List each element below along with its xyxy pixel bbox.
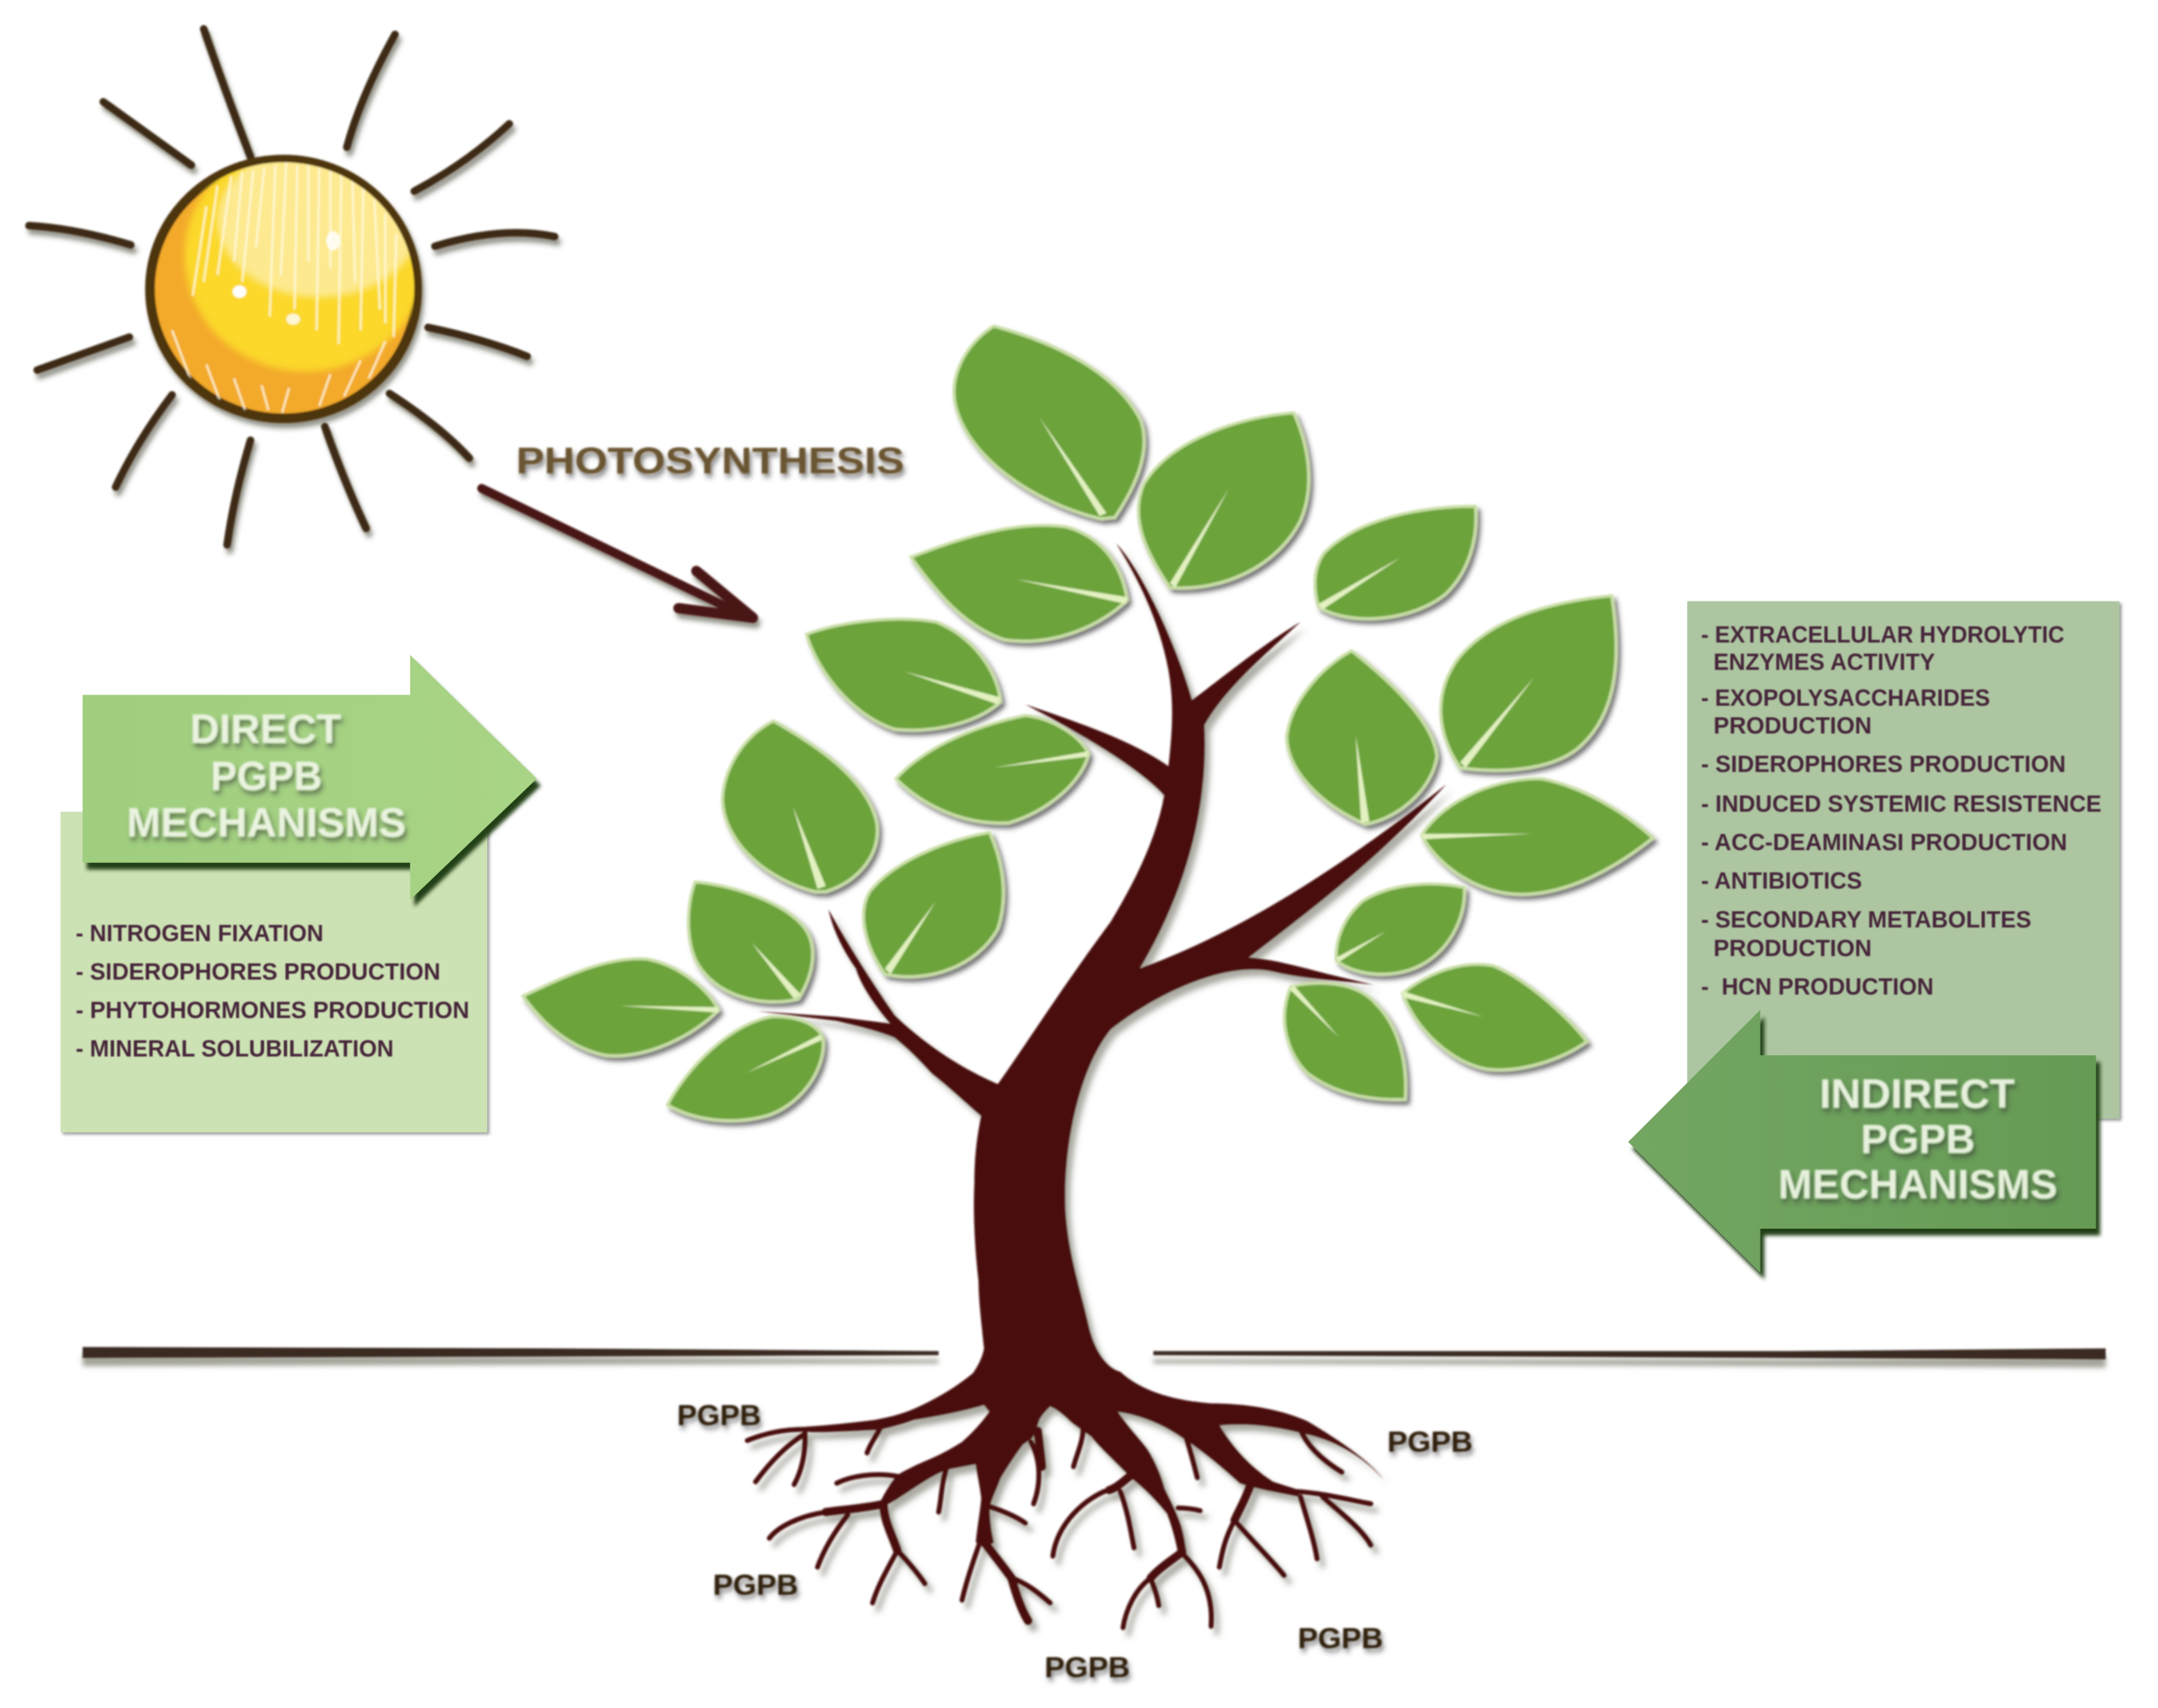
leaf 11 [667, 1017, 823, 1121]
leaf 14 [1421, 778, 1653, 895]
leaf 7 [722, 721, 877, 891]
indirect mechanisms list: PRODUCTION [1714, 712, 1872, 738]
PGPB root labels: PGPB [1298, 1623, 1383, 1655]
indirect mechanisms list [1701, 621, 2102, 1000]
heading: photosynthesis: PHOTOSYNTHESIS [516, 441, 904, 482]
indirect arrow [1628, 1010, 2096, 1273]
sun rays [29, 29, 555, 545]
direct arrow title: PGPB [210, 753, 322, 799]
indirect mechanisms list: PRODUCTION [1714, 935, 1872, 961]
direct arrow title: DIRECT [190, 707, 341, 753]
direct mechanisms list [76, 919, 469, 1062]
leaf 2 [1138, 413, 1308, 588]
indirect arrow title [1779, 1071, 2057, 1208]
indirect list background [1687, 602, 2120, 1118]
leaf 17 [1285, 983, 1406, 1100]
leaf 15 [1336, 884, 1464, 974]
root branches [747, 1427, 1371, 1628]
leaf 5 [807, 619, 1001, 730]
leaf 6 [896, 715, 1089, 823]
indirect mechanisms list: ENZYMES ACTIVITY [1714, 649, 1935, 675]
direct arrow title [126, 707, 406, 846]
direct arrow title: MECHANISMS [126, 800, 406, 846]
direct mechanisms list: - SIDEROPHORES PRODUCTION [76, 959, 440, 985]
indirect arrow title: MECHANISMS [1779, 1162, 2057, 1208]
PGPB root labels [677, 1400, 1473, 1684]
PGPB root labels: PGPB [1044, 1652, 1130, 1684]
leaf 3 [911, 525, 1127, 641]
direct arrow [83, 654, 537, 900]
direct mechanisms list: - MINERAL SOLUBILIZATION [76, 1036, 394, 1062]
indirect mechanisms list: - SIDEROPHORES PRODUCTION [1701, 750, 2066, 777]
panel: indirect mechanisms [1628, 602, 2120, 1273]
indirect arrow title: PGPB [1861, 1116, 1975, 1162]
icon: sun [29, 29, 555, 545]
leaf 8 [863, 832, 1003, 977]
PGPB root labels: PGPB [677, 1400, 761, 1432]
indirect mechanisms list: - ANTIBIOTICS [1701, 867, 1862, 894]
leaf 16 [1401, 965, 1587, 1070]
leaf 4 [1315, 507, 1476, 619]
leaf 12 [1287, 651, 1437, 825]
leaf 1 [954, 326, 1144, 519]
direct mechanisms list: - PHYTOHORMONES PRODUCTION [76, 997, 469, 1024]
PGPB root labels: PGPB [713, 1569, 798, 1601]
arrow: sunlight to plant [482, 489, 753, 618]
leaf 13 [1441, 596, 1616, 770]
indirect mechanisms list: - ACC-DEAMINASI PRODUCTION [1701, 829, 2067, 855]
indirect mechanisms list: - EXTRACELLULAR HYDROLYTIC [1701, 621, 2065, 648]
direct mechanisms list: - NITROGEN FIXATION [76, 919, 323, 946]
leaves [523, 326, 1653, 1121]
indirect arrow title: INDIRECT [1820, 1071, 2014, 1117]
leaf 10 [523, 959, 719, 1056]
indirect mechanisms list: - SECONDARY METABOLITES [1701, 906, 2032, 932]
indirect mechanisms list: - EXOPOLYSACCHARIDES [1701, 684, 1990, 711]
direct list background [61, 812, 487, 1132]
tree trunk, branches and roots [747, 543, 1446, 1628]
sun disc [150, 140, 426, 419]
indirect mechanisms list: - INDUCED SYSTEMIC RESISTENCE [1701, 790, 2102, 817]
panel: direct mechanisms [61, 654, 537, 1132]
PGPB root labels: PGPB [1387, 1426, 1473, 1459]
indirect mechanisms list: - HCN PRODUCTION [1701, 973, 1933, 1000]
soil line [83, 1347, 2106, 1359]
leaf 9 [689, 882, 813, 1001]
trunk and branches [757, 543, 1446, 1553]
